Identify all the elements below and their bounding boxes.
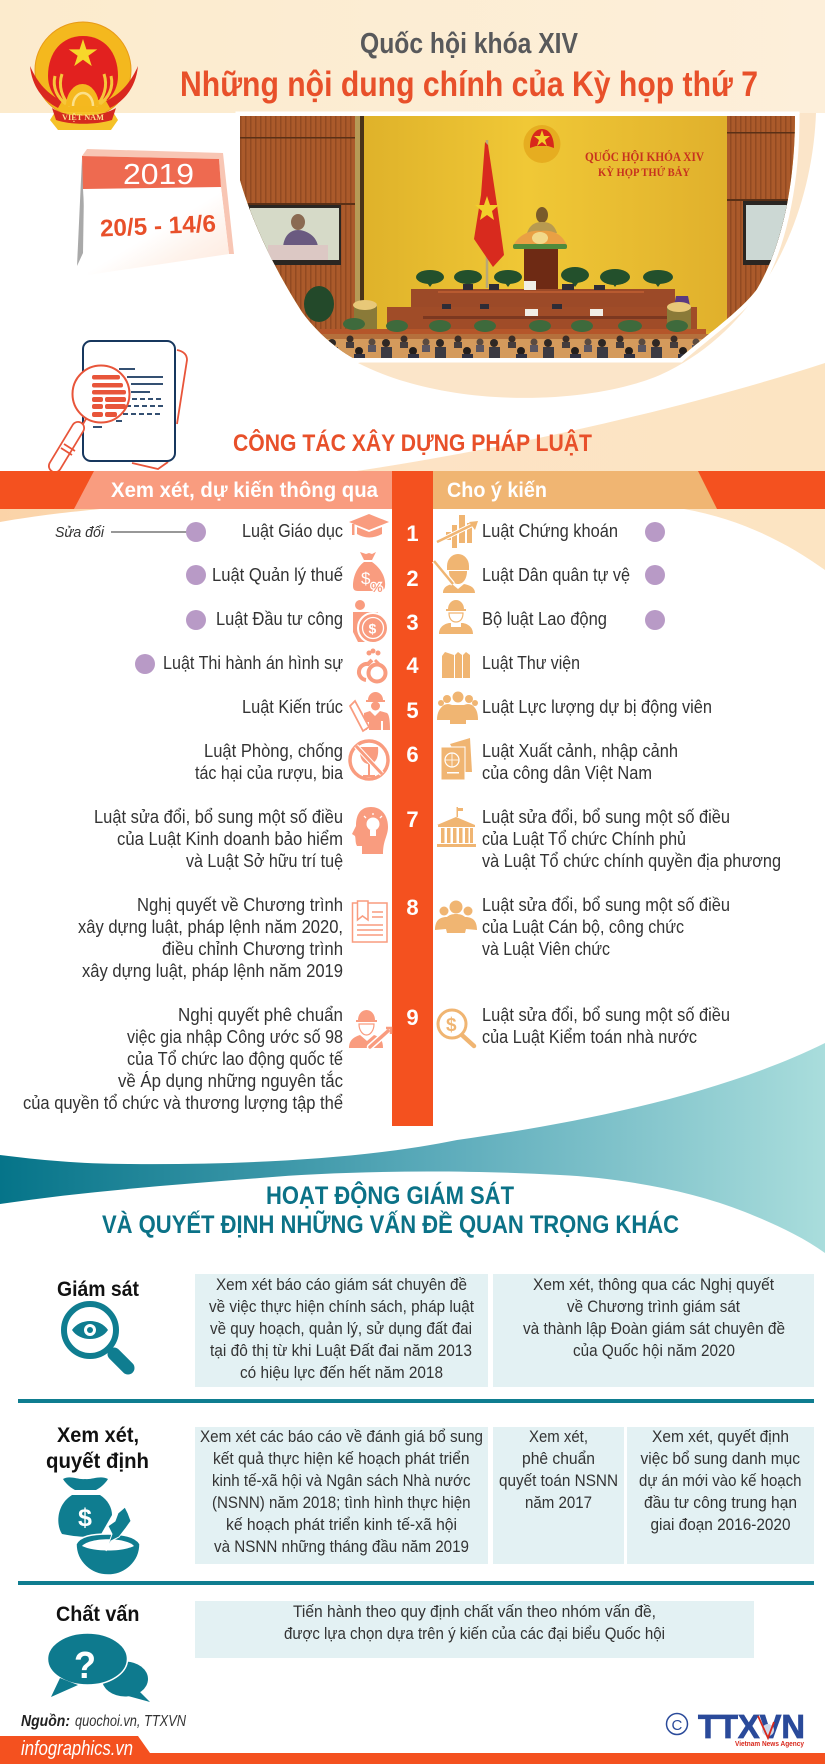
- center number bar: 7: [406, 807, 419, 832]
- panel: supervision programme: và thành lập Đoàn giám sát chuyên đề: [523, 1319, 785, 1338]
- icon: worker with wrench: [349, 1010, 391, 1048]
- left column laws: Luật Phòng, chống: [204, 741, 343, 761]
- panel: supervision programme: Xem xét, thông qua các Nghị quyết: [533, 1275, 774, 1294]
- center number bar: 3: [406, 610, 419, 635]
- panel: questioning: được lựa chọn dựa trên ý kiến của các đại biểu Quốc hội: [284, 1624, 665, 1643]
- center number bar: 8: [406, 895, 419, 920]
- left column laws: và Luật Sở hữu trí tuệ: [186, 851, 343, 871]
- peach swoosh behind law section: [0, 363, 825, 570]
- left column laws: của quyền tổ chức và thương lượng tập thể: [23, 1093, 343, 1113]
- panel: public investment: đầu tư công trung hạn: [644, 1493, 797, 1512]
- panel: budget settlement: Xem xét,: [529, 1427, 588, 1446]
- center number bar: 6: [406, 742, 419, 767]
- panel: questioning: Tiến hành theo quy định chất vấn theo nhóm vấn đề,: [293, 1602, 656, 1621]
- white ring around photo: [240, 116, 795, 358]
- footer bar: [0, 1736, 825, 1764]
- panel: supervision report: có hiệu lực đến hết năm 2018: [240, 1363, 443, 1382]
- panel: supervision label: Giám sát: [57, 1278, 139, 1301]
- left column laws: tác hại của rượu, bia: [195, 763, 344, 783]
- center number bar: 5: [406, 698, 419, 723]
- calendar: [77, 149, 234, 275]
- panel: supervision report: [195, 1274, 488, 1387]
- source credit: Nguồn:: [21, 1713, 70, 1730]
- icon: stock chart: [437, 515, 478, 548]
- icon: three officials: [435, 900, 477, 933]
- icon: dollar magnifier: [438, 1010, 474, 1046]
- panel: public investment: [627, 1427, 814, 1564]
- right column laws: Luật Dân quân tự vệ: [482, 565, 630, 585]
- panel: supervision report: về quy hoạch, quản lý, sử dụng đất đai: [210, 1319, 472, 1338]
- icon: money bag and rice bowl: $: [78, 1504, 92, 1532]
- panel: questioning: [195, 1601, 754, 1658]
- title: [180, 28, 758, 104]
- panel: review and decide label: Xem xét,: [57, 1424, 139, 1447]
- icon: passports: [441, 738, 472, 780]
- left column laws: việc gia nhập Công ước số 98: [127, 1027, 343, 1047]
- panel: budget reports: và NSNN những tháng đầu năm 2019: [214, 1537, 469, 1556]
- center number bar: 2: [406, 566, 419, 591]
- center number bar: 9: [406, 1005, 419, 1030]
- photo: national assembly hall: KỲ HỌP THỨ BẢY: [598, 165, 690, 179]
- right column laws: Luật Thư viện: [482, 653, 580, 673]
- icon: dollar magnifier: $: [446, 1015, 457, 1036]
- panel: public investment: giai đoạn 2016-2020: [650, 1515, 790, 1534]
- right column laws: Luật sửa đổi, bổ sung một số điều: [482, 1005, 730, 1025]
- logo: TTXVN: C: [672, 1717, 682, 1734]
- panel: supervision report: Xem xét báo cáo giám sát chuyên đề: [216, 1275, 467, 1294]
- panel: budget settlement: [493, 1427, 624, 1564]
- heading: supervision: [102, 1180, 679, 1239]
- left column laws: về Áp dụng những nguyên tắc: [118, 1070, 343, 1091]
- column header band: Xem xét, dự kiến thông qua: [111, 479, 378, 502]
- icon: investor with coin: [353, 600, 388, 643]
- right column laws: của Luật Tổ chức Chính phủ: [482, 829, 686, 849]
- panel: budget reports: kết quả thực hiện kế hoạch phát triển: [213, 1449, 470, 1468]
- icon: money bag and rice bowl: [58, 1477, 140, 1575]
- left column laws: Luật Quản lý thuế: [212, 565, 343, 585]
- left column laws: Luật Kiến trúc: [242, 697, 343, 717]
- column header band: [0, 471, 825, 509]
- panel: review and decide label: quyết định: [46, 1450, 149, 1473]
- panel: supervision programme: [493, 1274, 814, 1387]
- title: Quốc hội khóa XIV: [360, 28, 579, 60]
- panel: supervision report: tại đô thị từ khi Luật Đất đai năm 2013: [210, 1341, 472, 1360]
- icon: money bag with percent: $: [361, 569, 371, 588]
- left column laws: Luật sửa đổi, bổ sung một số điều: [94, 807, 343, 827]
- calendar: 20/5 - 14/6: [99, 210, 216, 243]
- panel: budget reports: kế hoạch phát triển kinh tế-xã hội: [226, 1515, 457, 1534]
- panel: questioning label: Chất vấn: [56, 1603, 140, 1626]
- icon: books: [442, 652, 470, 678]
- legend: amended marker: Sửa đổi: [55, 524, 105, 541]
- photo: national assembly hall: QUỐC HỘI KHÓA XIV: [585, 149, 705, 164]
- panel: public investment: dự án mới vào kế hoạch: [639, 1471, 802, 1490]
- source credit: quochoi.vn, TTXVN: [75, 1713, 186, 1730]
- icon: militia soldier: [434, 554, 475, 593]
- panel: public investment: Xem xét, quyết định: [652, 1427, 789, 1446]
- column header band: Cho ý kiến: [447, 479, 547, 502]
- right column laws: của công dân Việt Nam: [482, 763, 652, 783]
- purple amended dots: [135, 522, 665, 674]
- left column laws: Nghị quyết phê chuẩn: [178, 1005, 343, 1025]
- icon: crowd: [437, 692, 478, 724]
- footer bar: infographics.vn: [21, 1738, 133, 1760]
- icon: architect with plans: [350, 692, 390, 731]
- left column laws: Luật Giáo dục: [242, 521, 343, 541]
- icon: money bag with percent: [353, 552, 385, 595]
- right column laws: Luật sửa đổi, bổ sung một số điều: [482, 807, 730, 827]
- national emblem: VIỆT NAM: [62, 112, 104, 122]
- right column laws: Luật Chứng khoán: [482, 521, 618, 541]
- icon: investor with coin: $: [368, 620, 376, 636]
- panel: budget settlement: phê chuẩn: [522, 1449, 595, 1468]
- icon: document with bookmark: [352, 901, 387, 942]
- national emblem: [30, 22, 138, 130]
- heading: supervision: HOẠT ĐỘNG GIÁM SÁT: [266, 1180, 514, 1210]
- center number bar: 1: [406, 521, 419, 546]
- right column laws: [482, 521, 781, 1047]
- icon: handcuffs: [359, 648, 386, 682]
- panel: public investment: việc bổ sung danh mục: [640, 1449, 800, 1468]
- panel: review and decide label: [46, 1424, 149, 1473]
- center number bar: 4: [406, 653, 419, 678]
- panel: supervision programme: của Quốc hội năm 2020: [573, 1341, 735, 1360]
- panel: supervision report: về việc thực hiện chính sách, pháp luật: [209, 1297, 474, 1316]
- left column laws: Luật Đầu tư công: [216, 609, 343, 629]
- right column laws: và Luật Tổ chức chính quyền địa phương: [482, 851, 781, 871]
- icon: head with light bulb: [352, 807, 388, 854]
- photo: national assembly hall: [240, 116, 795, 358]
- right column laws: của Luật Cán bộ, công chức: [482, 917, 684, 937]
- panel: budget reports: Xem xét các báo cáo về đánh giá bổ sung: [200, 1427, 483, 1446]
- panel: budget reports: (NSNN) năm 2018; tình hình thực hiện: [212, 1493, 470, 1512]
- left column laws: xây dựng luật, pháp lệnh năm 2019: [82, 961, 343, 981]
- left column laws: điều chỉnh Chương trình: [162, 939, 343, 959]
- icon: document under magnifier: [55, 341, 187, 469]
- icons: left column: [349, 514, 391, 1048]
- icon: money bag with percent: %: [371, 580, 383, 595]
- panel: budget reports: kinh tế-xã hội và Ngân sách Nhà nước: [212, 1471, 471, 1490]
- icons: right column: [434, 515, 478, 1046]
- logo: TTXVN: TTXVN: [698, 1708, 805, 1745]
- panel: budget settlement: năm 2017: [525, 1493, 592, 1512]
- panel: budget settlement: quyết toán NSNN: [499, 1471, 618, 1490]
- header band: [0, 0, 825, 113]
- icon: money bag with percent: %: [371, 580, 383, 595]
- left column laws: xây dựng luật, pháp lệnh năm 2020,: [78, 917, 343, 937]
- icon: graduation cap: [349, 514, 389, 538]
- right column laws: Luật Xuất cảnh, nhập cảnh: [482, 741, 678, 761]
- logo: TTXVN: Vietnam News Agency: [735, 1739, 805, 1748]
- right column laws: Bộ luật Lao động: [482, 609, 607, 629]
- icon: government building: [437, 807, 476, 847]
- left column laws: của Tổ chức lao động quốc tế: [127, 1049, 343, 1069]
- right column laws: Luật Lực lượng dự bị động viên: [482, 697, 712, 717]
- icon: eye in magnifier: [64, 1304, 128, 1368]
- panel: budget reports: [195, 1427, 488, 1564]
- icon: speech bubbles with question mark: [48, 1633, 150, 1702]
- right column laws: Luật sửa đổi, bổ sung một số điều: [482, 895, 730, 915]
- peach circle behind photo: [358, 113, 816, 398]
- center number bar: [392, 471, 433, 1126]
- heading: law making: CÔNG TÁC XÂY DỰNG PHÁP LUẬT: [233, 429, 592, 457]
- panel: supervision programme: về Chương trình giám sát: [567, 1297, 740, 1316]
- icon: speech bubbles with question mark: ?: [74, 1645, 96, 1687]
- icon: construction worker: [439, 600, 473, 634]
- left column laws: của Luật Kinh doanh bảo hiểm: [117, 829, 343, 849]
- source credit: [21, 1713, 186, 1730]
- right column laws: và Luật Viên chức: [482, 939, 610, 959]
- teal swoosh: [0, 1043, 825, 1253]
- right column laws: của Luật Kiểm toán nhà nước: [482, 1027, 697, 1047]
- heading: supervision: VÀ QUYẾT ĐỊNH NHỮNG VẤN ĐỀ QUAN TRỌNG KHÁC: [102, 1209, 679, 1239]
- icon: no alcohol: [350, 741, 388, 779]
- left column laws: [23, 521, 344, 1113]
- left column laws: Nghị quyết về Chương trình: [137, 895, 343, 915]
- left column laws: Luật Thi hành án hình sự: [163, 653, 343, 673]
- calendar: 2019: [123, 159, 194, 191]
